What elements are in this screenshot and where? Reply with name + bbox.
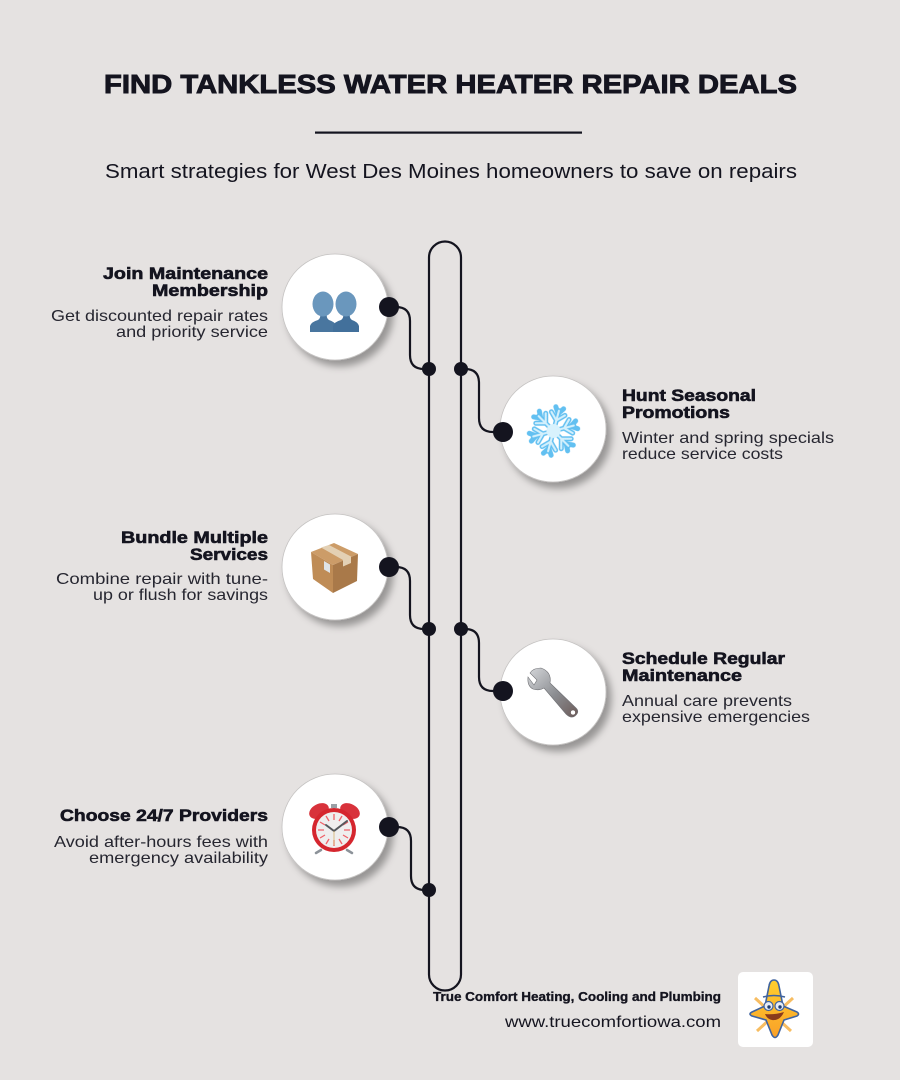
connector: seasonal	[461, 369, 503, 432]
title: FIND TANKLESS WATER HEATER REPAIR DEALS	[104, 69, 797, 99]
text: maintenance heading: Schedule Regular	[622, 649, 785, 668]
connector: membership	[389, 307, 429, 369]
text: membership heading: Membership	[152, 281, 268, 300]
connector: bundle	[389, 567, 429, 629]
icon: alarm clock	[306, 800, 363, 853]
step: bundle multiple services	[56, 514, 399, 620]
text: membership heading: Join Maintenance	[103, 264, 268, 283]
text: bundle description	[56, 571, 268, 604]
connector node	[379, 297, 399, 317]
icon: snowflake	[524, 402, 583, 460]
step: hunt seasonal promotions	[493, 376, 834, 482]
text: providers description: Avoid after-hours fees with	[54, 834, 268, 851]
footer: website: www.truecomfortiowa.com	[504, 1014, 721, 1031]
text: seasonal heading: Promotions	[622, 403, 730, 422]
connector node	[493, 422, 513, 442]
footer: company name: True Comfort Heating, Cooling and Plumbing	[433, 989, 721, 1004]
connector node	[379, 557, 399, 577]
rail junction dots	[422, 362, 468, 897]
icon: cardboard box	[311, 543, 358, 593]
connector: providers	[389, 827, 429, 890]
circle: maintenance	[500, 639, 606, 745]
text: seasonal heading: Hunt Seasonal	[622, 386, 756, 405]
text: maintenance description: Annual care prevents	[622, 693, 792, 710]
text: membership description	[51, 308, 268, 341]
circle: seasonal	[500, 376, 606, 482]
circle: providers	[282, 774, 388, 880]
text: bundle description: Combine repair with tune-	[56, 571, 268, 588]
text: bundle heading: Bundle Multiple	[121, 528, 268, 547]
text: providers description	[54, 834, 268, 867]
text: maintenance heading	[622, 649, 785, 685]
text: maintenance description	[622, 693, 810, 726]
text: seasonal description: Winter and spring specials	[622, 430, 834, 447]
text: bundle heading	[121, 528, 268, 564]
logo	[738, 972, 813, 1047]
text: maintenance description: expensive emergencies	[622, 709, 810, 726]
step: schedule regular maintenance	[493, 639, 810, 745]
step: join maintenance membership	[51, 254, 399, 360]
text: maintenance heading: Maintenance	[622, 666, 742, 685]
text: seasonal description	[622, 430, 834, 463]
text: membership heading	[103, 264, 268, 300]
text: seasonal heading	[622, 386, 756, 422]
circle: bundle	[282, 514, 388, 620]
connector node	[493, 681, 513, 701]
text: bundle heading: Services	[190, 545, 268, 564]
timeline rail	[429, 242, 461, 990]
icon: two people	[310, 292, 359, 332]
connector node	[379, 817, 399, 837]
circle: membership	[282, 254, 388, 360]
step: choose 24/7 providers	[54, 774, 399, 880]
text: providers description: emergency availability	[89, 850, 268, 867]
text: bundle description: up or flush for savings	[93, 587, 268, 604]
text: providers heading: Choose 24/7 Providers	[60, 806, 268, 825]
text: seasonal description: reduce service costs	[622, 446, 783, 463]
text: membership description: and priority service	[116, 324, 268, 341]
icon: wrench	[528, 668, 578, 717]
subtitle: Smart strategies for West Des Moines homeowners to save on repairs	[105, 161, 797, 183]
text: membership description: Get discounted repair rates	[51, 308, 268, 325]
connector: maintenance	[461, 629, 503, 691]
